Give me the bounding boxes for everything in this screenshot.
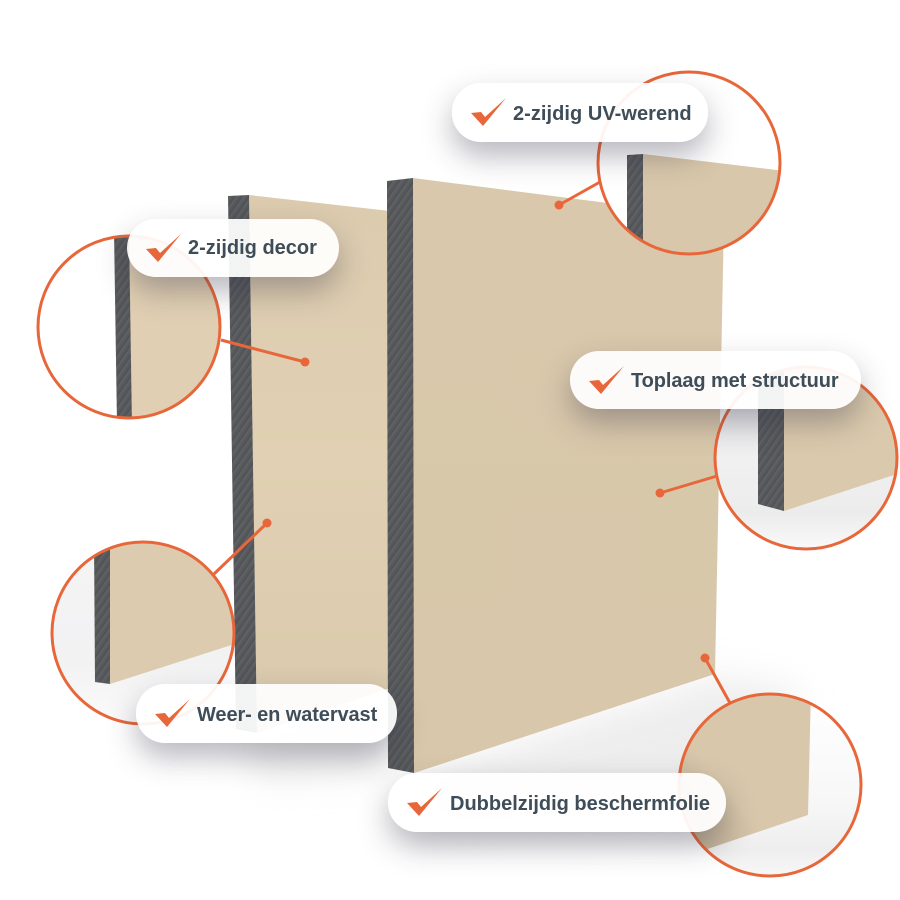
icon: check mark <box>471 98 506 126</box>
detail circle: Toplaag met structuur <box>714 360 900 551</box>
leader line: Dubbelzijdig beschermfolie <box>700 654 730 703</box>
text: Dubbelzijdig beschermfolie: Dubbelzijdig beschermfolie <box>450 793 710 815</box>
icon: check mark <box>146 234 181 262</box>
label: Dubbelzijdig beschermfolie <box>388 773 726 832</box>
floor shadow <box>240 676 800 830</box>
text: 2-zijdig decor: 2-zijdig decor <box>188 237 317 259</box>
leader line: 2-zijdig UV-werend <box>554 182 600 210</box>
icon: check mark <box>589 366 624 394</box>
leader line: Weer- en watervast <box>214 518 272 574</box>
detail circle: 2-zijdig decor <box>37 230 225 425</box>
text: 2-zijdig UV-werend: 2-zijdig UV-werend <box>513 103 692 125</box>
detail circle: Dubbelzijdig beschermfolie <box>675 690 862 878</box>
text: Weer- en watervast: Weer- en watervast <box>197 704 377 726</box>
detail circle: 2-zijdig UV-werend <box>597 71 785 260</box>
leader line: Toplaag met structuur <box>656 476 717 498</box>
label: 2-zijdig decor <box>127 219 339 277</box>
icon: check mark <box>155 699 190 727</box>
leader line: 2-zijdig decor <box>221 340 310 366</box>
label: Toplaag met structuur <box>570 351 861 409</box>
label: Weer- en watervast <box>136 684 397 743</box>
icon: check mark <box>407 788 442 816</box>
back panel <box>228 195 390 733</box>
label: 2-zijdig UV-werend <box>452 83 708 142</box>
text: Toplaag met structuur: Toplaag met structuur <box>631 370 839 392</box>
detail circle: Weer- en watervast <box>51 540 238 726</box>
front panel <box>387 178 724 773</box>
